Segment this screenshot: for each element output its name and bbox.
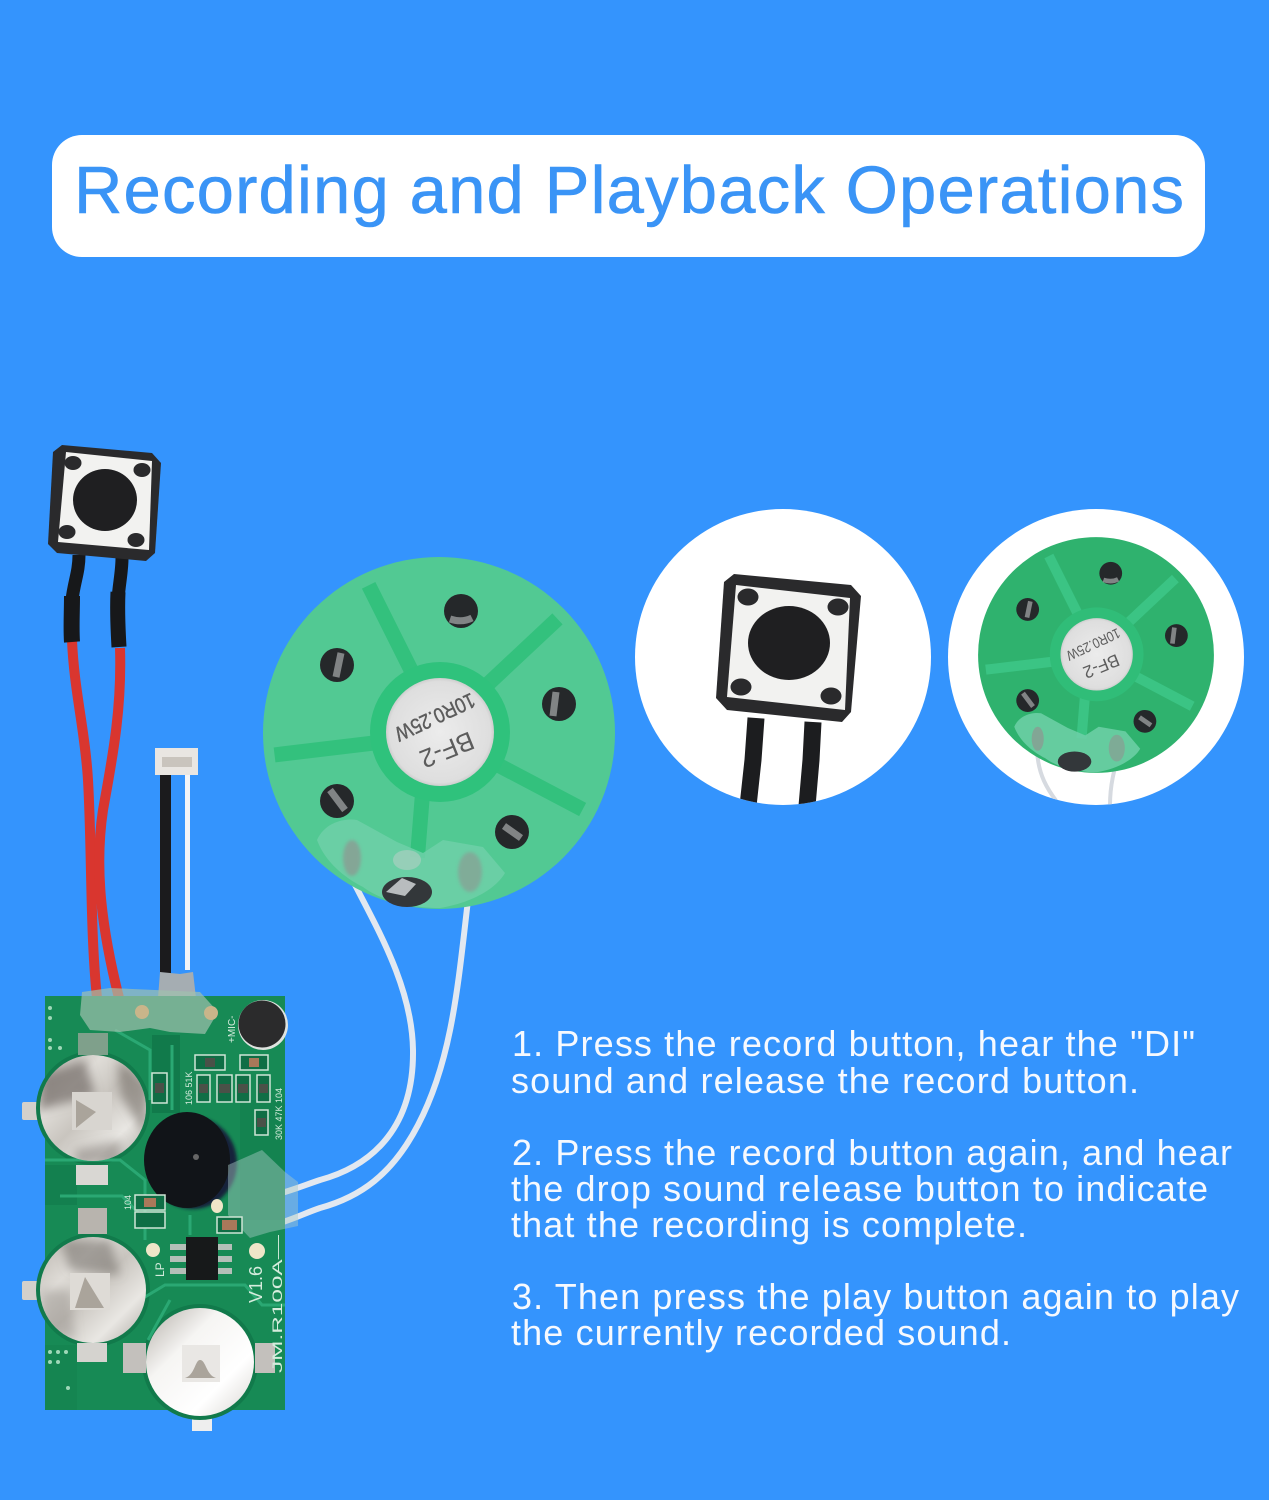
speaker cap markings: BF-2 [415, 726, 479, 774]
small components [135, 1055, 270, 1233]
chip [170, 1237, 232, 1280]
two-pin connector [155, 748, 198, 998]
board markings: 30K 47K 104 [274, 1088, 284, 1140]
step 3 [511, 1276, 1239, 1353]
title: Recording and Playback Operations [74, 153, 1184, 228]
title banner [52, 135, 1205, 257]
zoom circle: speaker [948, 509, 1244, 805]
wires [748, 718, 813, 806]
step 3: 3. Then press the play button again to play [512, 1276, 1239, 1317]
glue and solder [317, 820, 505, 908]
wires [1036, 756, 1116, 804]
white speaker wires to board [283, 875, 468, 1222]
step 1 [511, 1023, 1195, 1101]
board markings: JM.R100A— [269, 1235, 285, 1373]
large speaker [263, 557, 615, 909]
dark trace areas [36, 1035, 285, 1420]
coin cell 1 [40, 1033, 150, 1185]
push button with red wires [48, 445, 161, 998]
step 1: sound and release the record button. [511, 1060, 1139, 1101]
speaker ribs [282, 592, 576, 850]
red wire left [72, 640, 97, 998]
speaker holes [320, 594, 576, 849]
glue on top edge [80, 988, 218, 1034]
board markings [123, 1016, 285, 1373]
speaker cap markings [391, 688, 479, 774]
step 2: the drop sound release button to indicate [511, 1168, 1208, 1209]
black epoxy blob [144, 1112, 237, 1209]
zoom circle: button [635, 509, 931, 806]
small button [48, 445, 161, 561]
board markings: 104 [123, 1195, 133, 1210]
light traces [45, 1030, 285, 1340]
board markings: +MIC- [227, 1016, 238, 1043]
heat shrink sleeves [72, 555, 122, 647]
step 3: the currently recorded sound. [511, 1312, 1011, 1353]
component bodies [144, 1058, 268, 1230]
coin cell 3 [123, 1308, 275, 1416]
board markings: 106 51K [184, 1071, 194, 1105]
speaker hub ring [370, 662, 510, 802]
speaker: BF-2 [1080, 650, 1122, 683]
button [716, 574, 861, 722]
step 2: 2. Press the record button again, and hear [512, 1132, 1232, 1173]
step 2 [511, 1132, 1232, 1245]
step 1: 1. Press the record button, hear the "DI" [512, 1023, 1195, 1064]
via dots [48, 1006, 70, 1390]
board markings: LP [153, 1262, 167, 1277]
coin cell 2 [40, 1208, 146, 1362]
hole reflections [330, 618, 556, 838]
solder pads [135, 1005, 265, 1259]
step 2: that the recording is complete. [511, 1204, 1027, 1245]
red wire right [99, 648, 120, 998]
instructions [511, 1023, 1239, 1353]
speaker metal cap [386, 678, 494, 786]
microphone [238, 1000, 288, 1050]
speaker [978, 537, 1214, 773]
glue near wires [228, 1150, 298, 1238]
board markings: V1.6 [246, 1266, 266, 1303]
circuit board [22, 988, 298, 1431]
speaker cap markings: 10R0.25W [391, 688, 479, 745]
speaker: 10R0.25W [1063, 625, 1123, 664]
tabs of coin cells [22, 1102, 212, 1431]
